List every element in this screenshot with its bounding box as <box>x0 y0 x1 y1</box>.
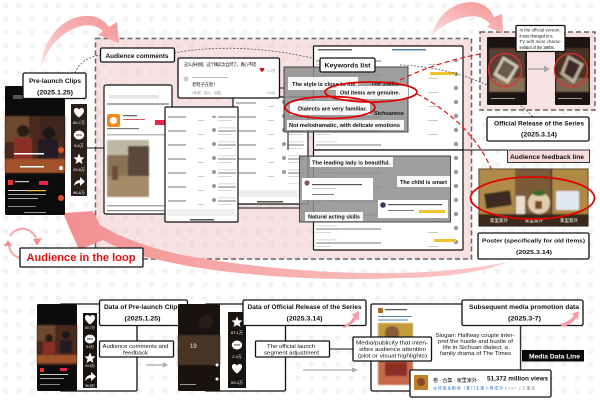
arrow: comments to official release <box>432 2 503 36</box>
poster: old items: 家里家外 <box>525 217 543 224</box>
connector: promotion data <box>520 325 522 370</box>
panel: media promotion <box>371 304 520 391</box>
label: pre-launch clips: Pre-launch Clips <box>29 78 82 85</box>
keyword: old items: Old items are genuine. <box>340 90 401 96</box>
label: media data line: Media Data Line <box>529 354 581 360</box>
connector: pre-launch data <box>136 325 138 341</box>
label: pre-launch clips <box>23 73 86 98</box>
card: views <box>410 370 551 397</box>
keyword: child: The child is smart <box>400 180 447 186</box>
stats strip: data clip <box>83 313 97 388</box>
stats strip: data clip: 60.7万 <box>85 326 96 330</box>
keywords list label <box>320 58 375 72</box>
screenshot: keyword comments lower <box>314 150 463 250</box>
label: audience feedback <box>100 341 174 357</box>
stats strip: data release <box>228 312 246 388</box>
stats strip: data clip: 93.8万 <box>85 364 96 368</box>
label: data of pre-launch clips: Data of Pre-launch Clips <box>104 305 182 311</box>
red circle: old TV after <box>554 54 588 86</box>
label: audience feedback line <box>508 150 590 162</box>
comment callout: 1045 <box>267 91 275 95</box>
phone: data clip <box>37 304 77 391</box>
label: media publicity: sifies audience attention <box>359 347 426 353</box>
label: data of official release: (2025.3.14) <box>286 316 322 322</box>
label: launch adjustment <box>256 341 330 357</box>
slogan text: life in Sichuan dialect, a <box>443 345 508 351</box>
label: official release: (2025.3.14) <box>521 132 557 138</box>
room photo <box>178 315 220 365</box>
social post image <box>378 308 413 385</box>
label: media publicity <box>353 337 432 361</box>
label: audience in the loop <box>20 248 143 267</box>
label: data of pre-launch clips: (2025.1.25) <box>124 316 160 322</box>
poster: old items: 家里家外 <box>490 217 508 224</box>
label: subsequent media data <box>462 300 583 326</box>
card: views: 5137.2万播放 <box>505 386 535 390</box>
arrow: promotion upward <box>560 311 579 327</box>
comment callout <box>178 58 280 98</box>
label: media data line <box>522 350 584 362</box>
arrow: release to promotion <box>342 311 359 328</box>
TV photo before <box>489 48 525 92</box>
dashed connector: comments to keywords <box>174 48 320 60</box>
drama photo <box>5 116 65 173</box>
slogan text: Slogan: Halfway couple inter- <box>436 333 515 339</box>
poster image <box>378 323 413 385</box>
keyword: leading lady: The leading lady is beautiful. <box>312 160 391 166</box>
stats strip: data release: 69.4万 <box>231 380 243 385</box>
label: data of official release <box>243 300 366 326</box>
label: launch adjustment: The official launch <box>267 344 315 350</box>
comment callout: 2.2万 <box>267 69 276 73</box>
keyword: 1980s: The 1980s <box>371 82 398 88</box>
poster artwork <box>479 169 588 226</box>
street photo <box>107 140 149 197</box>
panel: audience comments area <box>96 38 472 259</box>
arrow: version change <box>528 66 550 72</box>
keyword: leading lady <box>310 157 393 167</box>
panel: keywords upper <box>284 67 408 132</box>
label: official release <box>487 117 589 141</box>
arrow: clips to comments <box>41 16 119 68</box>
stats strip: pre-launch: 96.8万 <box>73 190 85 195</box>
stats strip: pre-launch <box>71 104 87 196</box>
keyword: not melodramatic: Not melodramatic, with delicate emotions <box>289 123 400 129</box>
phone: data release: 19 <box>190 344 197 350</box>
arrow: step two <box>303 368 358 372</box>
panel: official release screens <box>480 32 595 110</box>
comment callout: 1年前 · 四川 · 回复 <box>192 90 222 95</box>
label: audience comments: Audience comments <box>106 53 169 60</box>
label: audience feedback line: Audience feedback line <box>510 154 585 161</box>
comment callout: 这么多衬砌，这个确实太自然了。真心不错 <box>184 61 257 68</box>
label: audience comments <box>100 48 174 62</box>
keyword: child <box>397 176 450 187</box>
screenshot: comments feed right <box>233 97 308 204</box>
callout: version note: In the official version, <box>520 28 560 32</box>
slogan text: pret the hustle and bustle of <box>438 339 514 345</box>
keyword: natural acting: Natural acting skills <box>308 215 360 221</box>
panel: keywords lower <box>300 156 450 222</box>
slogan text <box>436 333 515 357</box>
card: views: 卷 · 合集 · 家里家外 <box>433 376 477 384</box>
stats strip: data clip: 96.8万 <box>85 384 96 388</box>
keywords list label: Keywords list <box>324 62 371 70</box>
poster: old items: 家里家外 <box>560 217 578 224</box>
label: launch adjustment: segment adjustment <box>264 350 320 356</box>
red circle: old TV before <box>488 54 522 86</box>
panel: data of official release <box>178 304 286 391</box>
label: subsequent media data: (2025.3-7) <box>508 316 541 322</box>
stats strip: data clip: 5.6万 <box>86 345 95 349</box>
gray dashed line: to official label <box>400 65 533 117</box>
label: official release: Official Release of the Series <box>494 120 585 128</box>
comment callout: 老鞋子在脸！ <box>192 81 218 88</box>
card: views: 51,372 million views <box>487 376 549 382</box>
phone: official release after <box>555 37 590 105</box>
comment card with stars <box>378 200 448 218</box>
label: poster: (2025.3.14) <box>516 250 552 256</box>
label: poster <box>478 233 589 259</box>
keyword: natural acting <box>305 212 363 221</box>
callout: version note: it was changed to a <box>520 33 553 38</box>
card: views: @祁瑶岛剧场（掌门主理人养成中 <box>433 386 503 390</box>
comment card <box>302 178 373 200</box>
stats strip: pre-launch: 60.7万 <box>73 120 85 125</box>
label: poster: Poster (specifically for old items) <box>482 238 585 244</box>
screenshot: comments feed left <box>165 107 238 222</box>
screenshot: search result <box>104 85 172 214</box>
red dashed line: to official release <box>400 54 481 80</box>
label: audience in the loop: Audience in the loop <box>26 252 136 264</box>
drama photo small <box>37 325 77 365</box>
phone: pre-launch clip <box>5 86 65 215</box>
red ellipse: old items <box>325 82 417 102</box>
label: audience feedback: Audience comments and <box>102 344 169 350</box>
callout: version note: teristics of the 1980s. <box>520 45 554 50</box>
label: pre-launch clips: (2025.1.25) <box>37 90 73 96</box>
label: media publicity: Media/publicity that inten- <box>356 340 428 346</box>
label: audience feedback: feedback <box>123 350 148 356</box>
stats strip: pre-launch: 93.8万 <box>73 167 85 172</box>
label: subsequent media data: Subsequent media promotion data <box>469 305 580 311</box>
stats strip: pre-launch: 5.6万 <box>74 143 84 148</box>
callout: version note <box>516 26 565 52</box>
red ellipse: dialects <box>285 96 375 118</box>
TV photo after <box>556 48 589 92</box>
connector: popup to keywords <box>87 88 507 208</box>
keyword: Sichuanese: Sichuanese <box>374 111 404 117</box>
keyword: style: The style is close to life. <box>292 82 358 88</box>
label: data of official release: Data of Official Release of the Series <box>248 305 362 311</box>
red dashed line: to poster <box>417 94 492 171</box>
stats strip: data release: 2.4万 <box>232 354 242 359</box>
arrow: step one <box>146 362 168 368</box>
red ellipse: poster <box>470 177 594 219</box>
arrow: large return arrow <box>63 211 507 279</box>
screenshot: keyword comments upper <box>314 46 463 150</box>
panel: data of pre-launch clips <box>37 304 137 391</box>
callout: version note: TV with more charac- <box>520 39 562 44</box>
label: media publicity: (plot or visual highlights) <box>358 354 427 360</box>
phone: official release before <box>487 37 527 105</box>
stats strip: data release: 67.1万 <box>231 330 243 335</box>
label: data of pre-launch clips <box>100 300 188 326</box>
poster: old items <box>478 168 588 226</box>
slogan text: family drama of The Times <box>440 351 512 357</box>
connector: release data <box>286 325 353 349</box>
icon: loop arrows <box>4 229 42 258</box>
keyword: dialects: Dialects are very familiar. <box>298 106 368 112</box>
dashed connector: clips to comments label <box>75 55 100 73</box>
